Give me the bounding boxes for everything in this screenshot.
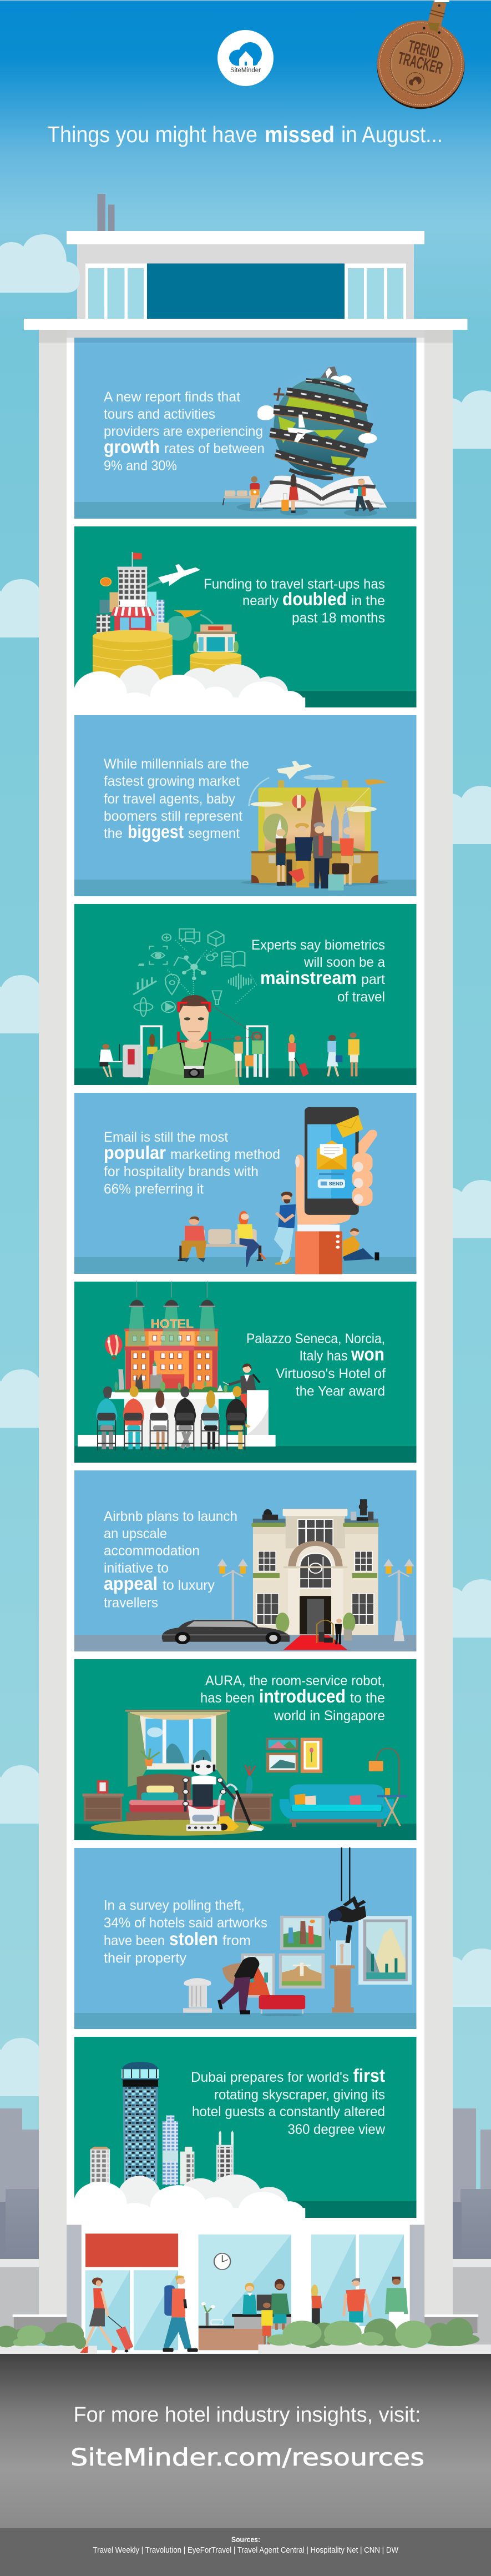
text: Airbnb: appeal xyxy=(104,1573,158,1594)
illustration: hand holding phone and people on devices: SEND xyxy=(329,1181,343,1186)
text: hotel award: won xyxy=(351,1344,384,1364)
text: Airbnb: accommodation xyxy=(104,1543,200,1559)
text: robot xyxy=(200,1673,385,1724)
text: Airbnb: Airbnb plans to launch xyxy=(104,1509,237,1524)
trend tracker leather tag: TREND xyxy=(406,37,441,63)
text: theft: from xyxy=(222,1933,251,1949)
text: hotel award: Palazzo Seneca, Norcia, xyxy=(246,1331,385,1347)
text: robot: AURA, the room-service robot, xyxy=(205,1673,385,1689)
illustration: art gallery with thieves xyxy=(183,1847,412,2016)
text: robot: to the xyxy=(350,1690,385,1706)
text: biometrics: part xyxy=(361,972,385,987)
text: email marketing xyxy=(104,1129,280,1197)
text: funding: in the xyxy=(351,593,385,609)
illustration: hand holding phone and people on devices xyxy=(178,1107,379,1274)
text: funding: doubled xyxy=(282,589,347,609)
side clouds right xyxy=(438,390,491,2007)
text: Airbnb: an upscale xyxy=(104,1526,167,1541)
text: theft: In a survey polling theft, xyxy=(104,1898,245,1914)
footer sources xyxy=(0,2528,491,2576)
text: tours growth: tours and activities xyxy=(104,406,215,422)
reception desk and clock xyxy=(199,2253,291,2350)
text: millennials: biggest xyxy=(128,821,184,842)
call to action xyxy=(70,2403,424,2472)
illustration: hotel award ceremony xyxy=(78,1281,276,1450)
text: tours growth: growth xyxy=(104,436,160,457)
logo badge: SiteMinder xyxy=(230,67,261,74)
panel 5: email marketing xyxy=(74,1093,416,1274)
text: robot: has been xyxy=(200,1690,255,1706)
footer sources: Travel Weekly | Travolution | EyeForTravel | Travel Agent Central | Hospitality Net | CNN | DW xyxy=(93,2545,399,2555)
illustration: hotel room with robot xyxy=(82,1710,407,1836)
panel 3: millennials and baby boomers xyxy=(74,715,416,896)
text: funding xyxy=(204,576,385,626)
text: Dubai: Dubai prepares for world's xyxy=(191,2070,349,2085)
illustration: luxury hotel facade and limousine xyxy=(162,1499,414,1650)
text: tours growth xyxy=(104,389,265,474)
pavement xyxy=(0,2344,491,2354)
panel 2: funding for start-ups xyxy=(74,526,417,721)
text: millennials: fastest growing market xyxy=(104,774,240,789)
footer sources: Sources: xyxy=(231,2535,260,2544)
skyline right xyxy=(453,2108,491,2346)
backpacker xyxy=(163,2276,198,2352)
text: hotel award xyxy=(246,1331,386,1399)
panel 8: room service robot xyxy=(74,1659,416,1840)
main ledge xyxy=(24,319,467,330)
storefront frame xyxy=(67,2221,424,2354)
text: tours growth: 9% and 30% xyxy=(104,458,177,474)
call to action: For more hotel industry insights, visit: xyxy=(73,2403,421,2427)
text: email marketing: popular xyxy=(104,1142,166,1163)
illustration: tourists and open suitcase of landmarks xyxy=(241,761,388,891)
illustration: Dubai skyscrapers over clouds xyxy=(90,2062,234,2185)
title: in August... xyxy=(341,122,443,147)
illustration: city and hotel on stacks of coins xyxy=(74,552,305,721)
clouds: Dubai panel xyxy=(74,2175,305,2232)
text: millennials xyxy=(104,756,249,842)
text: hotel award: Virtuoso's Hotel of xyxy=(276,1366,386,1382)
illustration: globe wrapped in roads on an open book xyxy=(223,361,387,516)
text: funding: past 18 months xyxy=(292,610,385,626)
shadow under ledge xyxy=(39,330,453,343)
building: main tower body xyxy=(39,330,453,2314)
lobby people xyxy=(242,2277,408,2344)
text: theft: their property xyxy=(104,1950,186,1966)
text: email marketing: for hospitality brands with xyxy=(104,1164,259,1179)
text: millennials: boomers still represent xyxy=(104,809,242,824)
text: Airbnb xyxy=(104,1509,237,1610)
text: Dubai xyxy=(191,2065,386,2137)
text: millennials: the xyxy=(104,826,123,841)
trend tracker leather tag xyxy=(377,0,464,109)
text: millennials: for travel agents, baby xyxy=(104,791,235,807)
text: tours growth: A new report finds that xyxy=(104,389,240,405)
left wall planter xyxy=(13,2314,478,2333)
chimneys xyxy=(98,194,114,231)
text: millennials: While millennials are the xyxy=(104,756,249,772)
logo badge xyxy=(217,30,274,86)
text: Dubai: hotel guests a constantly altered xyxy=(192,2104,385,2120)
text: Airbnb: travellers xyxy=(104,1595,158,1610)
text: biometrics: Experts say biometrics xyxy=(251,937,385,953)
text: theft: stolen xyxy=(169,1929,218,1949)
text: hotel award: the Year award xyxy=(296,1384,385,1399)
panel 7: Airbnb luxury xyxy=(74,1470,416,1651)
text: theft: 34% of hotels said artworks xyxy=(104,1915,267,1931)
text: funding: Funding to travel start-ups has xyxy=(204,576,385,592)
ground floor lobby xyxy=(0,2221,491,2354)
website address: SiteMinder.com/resources xyxy=(70,2444,424,2472)
text: robot: world in Singapore xyxy=(274,1708,385,1724)
text: biometrics: mainstream xyxy=(260,967,357,988)
text: biometrics: will soon be a xyxy=(303,955,385,970)
text: tours growth: rates of between xyxy=(164,441,265,456)
text: funding: nearly xyxy=(242,593,279,609)
skyline left xyxy=(0,2108,39,2346)
text: Airbnb: initiative to xyxy=(104,1560,169,1576)
ground road xyxy=(0,2354,491,2528)
trend tracker leather tag: TRACKER xyxy=(396,48,444,78)
illustration: hotel award ceremony: HOTEL xyxy=(151,1317,194,1331)
bushes xyxy=(0,2318,480,2349)
building: penthouse xyxy=(67,231,424,319)
text: biometrics: of travel xyxy=(337,990,385,1005)
text: tours growth: providers are experiencing xyxy=(104,424,263,439)
red sign xyxy=(85,2233,178,2267)
woman with suitcase xyxy=(80,2277,133,2353)
roof cloud xyxy=(0,234,80,293)
text: millennials: segment xyxy=(188,826,240,841)
panel 6: hotel of the year xyxy=(74,1281,416,1463)
title: missed xyxy=(265,122,335,147)
panel 9: artwork theft xyxy=(74,1847,416,2029)
text: Dubai: first xyxy=(353,2065,385,2086)
panel 10: Dubai rotating skyscraper xyxy=(74,2037,417,2232)
text: email marketing: 66% preferring it xyxy=(104,1182,204,1197)
text: Airbnb: to luxury xyxy=(163,1578,215,1593)
text: theft: have been xyxy=(104,1933,165,1949)
panel 4: biometrics xyxy=(74,904,416,1085)
title xyxy=(47,122,443,147)
text: email marketing: marketing method xyxy=(170,1147,280,1162)
text: hotel award: Italy has xyxy=(300,1348,347,1364)
text: theft xyxy=(104,1898,267,1966)
text: Dubai: 360 degree view xyxy=(287,2122,386,2137)
text: email marketing: Email is still the most xyxy=(104,1129,228,1145)
text: Dubai: rotating skyscraper, giving its xyxy=(214,2087,385,2102)
glass windows xyxy=(85,2234,404,2350)
top edge line xyxy=(0,0,491,1)
text: robot: introduced xyxy=(259,1686,346,1706)
side clouds left xyxy=(0,579,58,2096)
panel 1: tours growth xyxy=(74,338,416,519)
text: biometrics xyxy=(251,937,385,1005)
illustration: face scan, data icons and security gates xyxy=(99,929,360,1085)
title: Things you might have xyxy=(47,122,257,147)
